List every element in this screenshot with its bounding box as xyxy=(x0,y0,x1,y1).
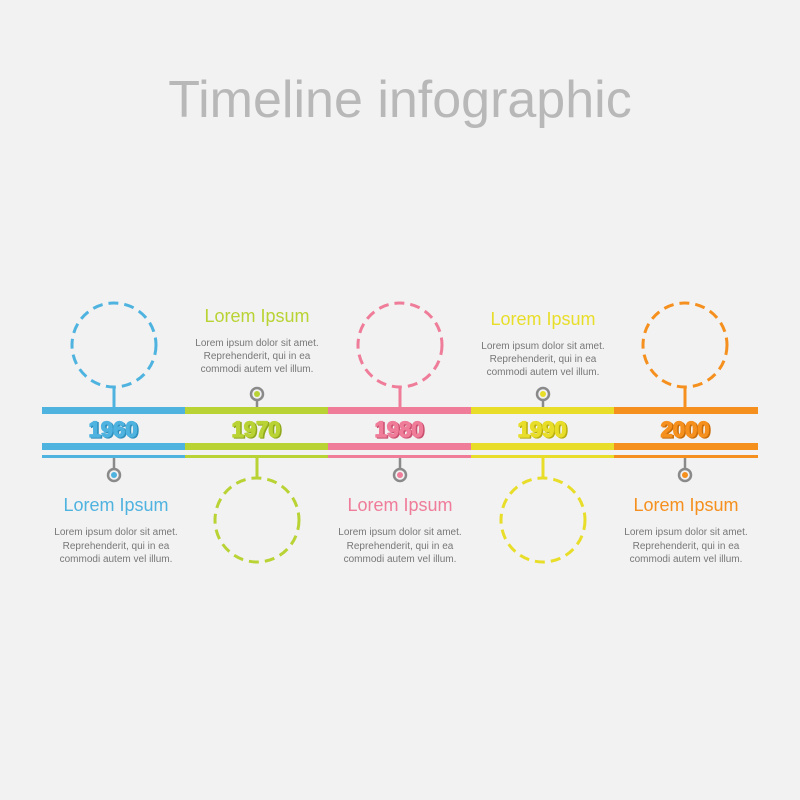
text blocks: Lorem ipsum dolor sit amet. xyxy=(54,527,178,538)
text blocks: Lorem Ipsum xyxy=(633,495,739,515)
pins xyxy=(108,388,691,481)
title: Timeline infographic xyxy=(168,71,632,129)
text blocks: commodi autem vel illum. xyxy=(630,554,742,565)
years: 1970 xyxy=(233,418,282,443)
text blocks xyxy=(54,306,748,565)
text blocks: commodi autem vel illum. xyxy=(60,554,172,565)
years: 1990 xyxy=(518,417,566,442)
years: 1990 xyxy=(519,418,568,443)
years: 1960 xyxy=(89,417,137,442)
text blocks: Lorem ipsum dolor sit amet. xyxy=(481,341,605,352)
text blocks: Lorem ipsum dolor sit amet. xyxy=(624,527,748,538)
text blocks: Lorem ipsum dolor sit amet. xyxy=(195,338,319,349)
years xyxy=(89,417,711,443)
years: 2000 xyxy=(661,417,709,442)
years: 1970 xyxy=(232,417,280,442)
text blocks: Lorem Ipsum xyxy=(490,309,596,329)
text blocks: Reprehenderit, qui in ea xyxy=(63,541,170,552)
text blocks: Reprehenderit, qui in ea xyxy=(347,541,454,552)
dashed circles xyxy=(72,303,727,562)
years: 2000 xyxy=(662,418,711,443)
text blocks: Reprehenderit, qui in ea xyxy=(204,351,311,362)
text blocks: Lorem ipsum dolor sit amet. xyxy=(338,527,462,538)
text blocks: Lorem Ipsum xyxy=(63,495,169,515)
years: 1980 xyxy=(375,417,423,442)
years: 1960 xyxy=(90,418,139,443)
text blocks: Lorem Ipsum xyxy=(347,495,453,515)
text blocks: commodi autem vel illum. xyxy=(344,554,456,565)
connectors xyxy=(114,388,685,477)
years: 1980 xyxy=(376,418,425,443)
text blocks: commodi autem vel illum. xyxy=(487,367,599,378)
text blocks: commodi autem vel illum. xyxy=(201,364,313,375)
text blocks: Reprehenderit, qui in ea xyxy=(633,541,740,552)
timeline bars xyxy=(42,407,758,458)
text blocks: Reprehenderit, qui in ea xyxy=(490,354,597,365)
text blocks: Lorem Ipsum xyxy=(204,306,310,326)
